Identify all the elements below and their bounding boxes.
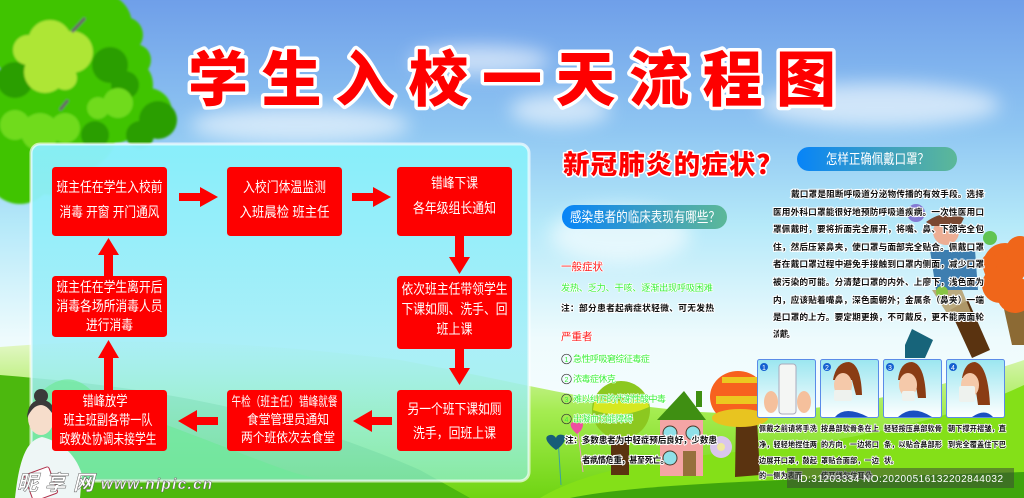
mask instructions text: 是口罩的上方。要定期更换，不可戴反，更不能两面轮	[773, 311, 984, 322]
nurse figure	[15, 389, 82, 498]
teal arrow shape in the grass	[905, 329, 933, 358]
arrow	[449, 236, 470, 274]
mask instructions text: 罩佩戴时，要将折面完全展开，将嘴、鼻、下颌完全包	[773, 223, 984, 234]
mask step 1: 1	[762, 365, 766, 372]
box: temperature check	[227, 167, 342, 236]
box: another class: 另一个班下课如厕	[408, 401, 502, 417]
box: lunch: 午检（班主任）错峰就餐	[232, 394, 338, 409]
pill: how to wear mask	[797, 147, 957, 171]
arrow	[352, 187, 391, 207]
severe cases: 1	[565, 357, 569, 364]
image id bar	[787, 468, 1014, 488]
heart flowers	[546, 422, 732, 485]
box: after students leave: 班主任在学生离开后	[56, 279, 162, 295]
box: staggered dismissal: 各年级组长通知	[413, 200, 496, 216]
severe cases: 者病情危重，甚至死亡。	[582, 454, 669, 465]
box: another class	[397, 390, 512, 451]
arrow	[353, 410, 392, 432]
arrow	[98, 238, 119, 276]
mask instructions text: 内，应该贴着嘴鼻，深色面朝外；金属条（鼻夹）一端	[773, 294, 984, 305]
figure: coughing man	[907, 204, 997, 315]
general symptoms: 发热、乏力、干咳、逐渐出现呼吸困难	[561, 282, 713, 293]
mask step captions: 到完全覆盖住下巴	[948, 440, 1006, 449]
mask instructions text: 被污染的可能。分清楚口罩的内外、上廖下，浅色面为	[773, 276, 984, 287]
mask instructions text: 者在戴口罩过程中避免手接触到口罩内侧面，减少口罩	[773, 258, 984, 269]
mask step 2: 2	[825, 365, 829, 372]
box: class teacher leads students: 下课如厕、洗手、回	[402, 301, 508, 317]
severe cases	[561, 330, 717, 465]
tree: top-left green	[0, 0, 177, 204]
severe cases: 4	[565, 417, 569, 424]
general symptoms	[561, 260, 714, 313]
clouds	[190, 46, 1000, 263]
mask step captions: 按鼻部软骨条在上	[821, 424, 879, 433]
arrow	[449, 349, 470, 385]
box: another class: 洗手，回班上课	[413, 425, 496, 441]
box: class teacher leads students	[397, 276, 512, 349]
tree: right orange tree	[950, 236, 1024, 358]
mask instructions text: 戴口罩是阻断呼吸道分泌物传播的有效手段。选择	[791, 188, 984, 199]
mask instructions text	[773, 188, 984, 339]
mask step captions: 条，以贴合鼻部形	[884, 440, 942, 449]
box: after students leave	[52, 276, 167, 337]
tree: orange striped tree	[710, 371, 768, 477]
general symptoms: 一般症状	[561, 260, 603, 273]
mask step captions: 朝下撑开褶皱，直	[948, 424, 1006, 433]
arrow	[98, 340, 119, 390]
severe cases: 出凝血功能障碍	[573, 413, 633, 424]
box: after students leave: 消毒各场所消毒人员	[56, 298, 162, 314]
box: class teacher leads students: 班上课	[436, 321, 472, 337]
severe cases: 3	[565, 397, 569, 404]
severe cases: 注：多数患者为中轻症预后良好，少数患	[565, 434, 717, 445]
mask instructions text: 流戴。	[773, 328, 795, 339]
mask step 2	[820, 360, 878, 418]
box: staggered leaving	[52, 390, 167, 451]
arrow	[178, 410, 218, 432]
arrow	[179, 187, 218, 207]
heading: symptoms: 新冠肺炎的症状？	[563, 143, 783, 182]
mask step captions	[759, 424, 1006, 480]
mask instructions text: 医用外科口罩能很好地预防呼吸道疾病。一次性医用口	[773, 206, 984, 217]
severe cases: 急性呼吸窘综征毒症	[573, 353, 650, 364]
title: 学生入校一天流程图	[188, 32, 836, 119]
watermark logo: www.nipic.cn	[101, 476, 212, 493]
mask step captions: 的一侧为表面	[759, 471, 802, 480]
box: lunch	[227, 390, 342, 451]
box: before school: 消毒 开窗 开门通风	[60, 204, 160, 220]
box: staggered leaving: 政教处协调未接学生	[60, 431, 156, 447]
mask step 4: 4	[951, 365, 955, 372]
mask instructions text: 住，然后压紧鼻夹，使口罩与面部完全贴合。佩戴口罩	[773, 241, 984, 252]
box: lunch: 食堂管理员通知	[247, 412, 329, 427]
mask step captions: 轻轻按压鼻部软骨	[884, 424, 942, 433]
mask step 4	[946, 360, 1004, 418]
watermark logo: 昵享网	[17, 472, 97, 495]
box: class teacher leads students: 依次班主任带领学生	[402, 281, 508, 297]
mask step 3	[884, 360, 942, 418]
mask step captions: 状。	[884, 456, 898, 465]
box: staggered leaving: 班主班副各带一队	[64, 412, 152, 428]
box: staggered dismissal	[397, 167, 512, 236]
house	[657, 391, 706, 476]
image id bar: ID:31203334 NO:20200516132202844032	[797, 474, 1003, 485]
severe cases: 浓毒症休克	[573, 373, 616, 384]
mask step captions: 使耳绳勾住耳朵	[821, 471, 872, 480]
pill: how to wear mask: 怎样正确佩戴口罩？	[826, 151, 929, 167]
flow panel	[15, 144, 529, 498]
severe cases: 难以纠正的代谢性酸中毒	[573, 393, 666, 404]
mask step 3: 3	[888, 365, 892, 372]
box: temperature check: 入校门体温监测	[243, 179, 326, 195]
mask step captions: 佩戴之前请将手洗	[759, 424, 818, 433]
green hills	[0, 342, 1024, 498]
box: after students leave: 进行消毒	[86, 317, 133, 333]
mask step captions: 罩贴合面部，一边	[821, 456, 880, 465]
box: before school	[52, 167, 167, 236]
severe cases: 2	[565, 377, 569, 384]
severe cases: 严重者	[561, 330, 592, 343]
box: staggered dismissal: 错峰下课	[431, 175, 478, 191]
box: before school: 班主任在学生入校前	[56, 179, 162, 195]
box: lunch: 两个班依次去食堂	[241, 430, 335, 445]
box: staggered leaving: 错峰放学	[82, 393, 128, 409]
mask step captions: 边展开口罩，鼓起	[759, 456, 818, 465]
general symptoms: 注：部分患者起病症状轻微、可无发热	[561, 302, 714, 313]
panel hills	[33, 379, 320, 478]
mask step captions: 的方向，一边将口	[821, 440, 879, 449]
pill: clinical manifestations: 感染患者的临床表现有哪些？	[570, 209, 720, 225]
mask step 1	[758, 360, 816, 418]
mask step captions: 净，轻轻地捏住两	[759, 440, 817, 449]
box: temperature check: 入班晨检 班主任	[240, 204, 330, 220]
watermark logo	[17, 472, 212, 495]
pill: clinical manifestations	[562, 205, 727, 229]
tree: small round tree	[592, 381, 650, 475]
